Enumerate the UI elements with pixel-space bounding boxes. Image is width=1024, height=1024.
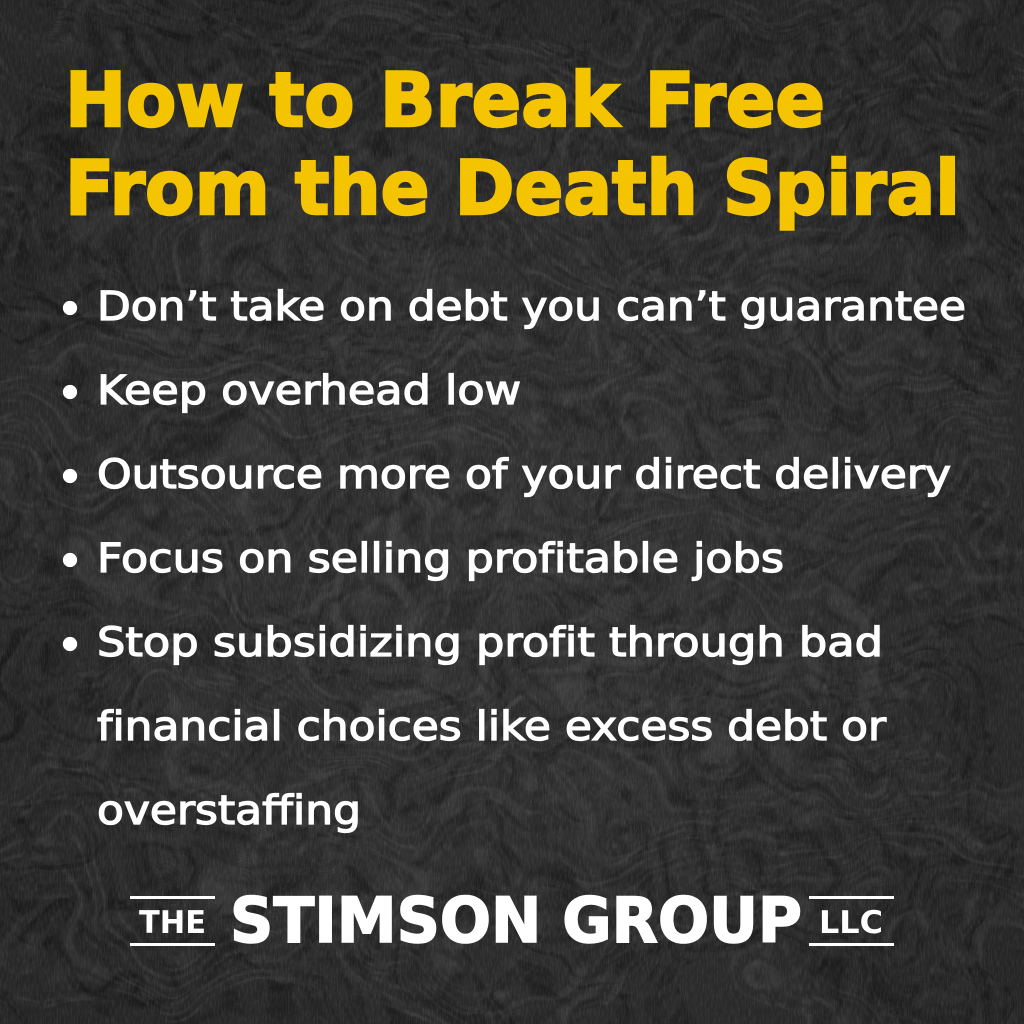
logo: STIMSON GROUP: STIMSON GROUP (230, 884, 802, 957)
bullet 4: Focus on selling profitable jobs (97, 536, 784, 582)
bullet 3: Outsource more of your direct delivery (97, 452, 951, 498)
bullet 5: Stop subsidizing profit through bad (97, 620, 883, 666)
bullet list (64, 284, 966, 834)
logo: THE: THE (139, 905, 206, 941)
logo: The Stimson Group LLC (130, 884, 894, 957)
logo: LLC (809, 896, 894, 946)
logo: THE (130, 896, 215, 946)
title (65, 56, 960, 232)
bullet 5: overstaffing (97, 788, 361, 834)
title: How to Break Free (65, 56, 825, 144)
bullet 1: Don’t take on debt you can’t guarantee (97, 284, 966, 330)
bullet 5 (64, 620, 887, 834)
title: From the Death Spiral (65, 144, 960, 232)
logo: LLC: LLC (819, 905, 883, 941)
bullet 5: financial choices like excess debt or (97, 704, 887, 750)
bullet 2: Keep overhead low (97, 368, 521, 414)
